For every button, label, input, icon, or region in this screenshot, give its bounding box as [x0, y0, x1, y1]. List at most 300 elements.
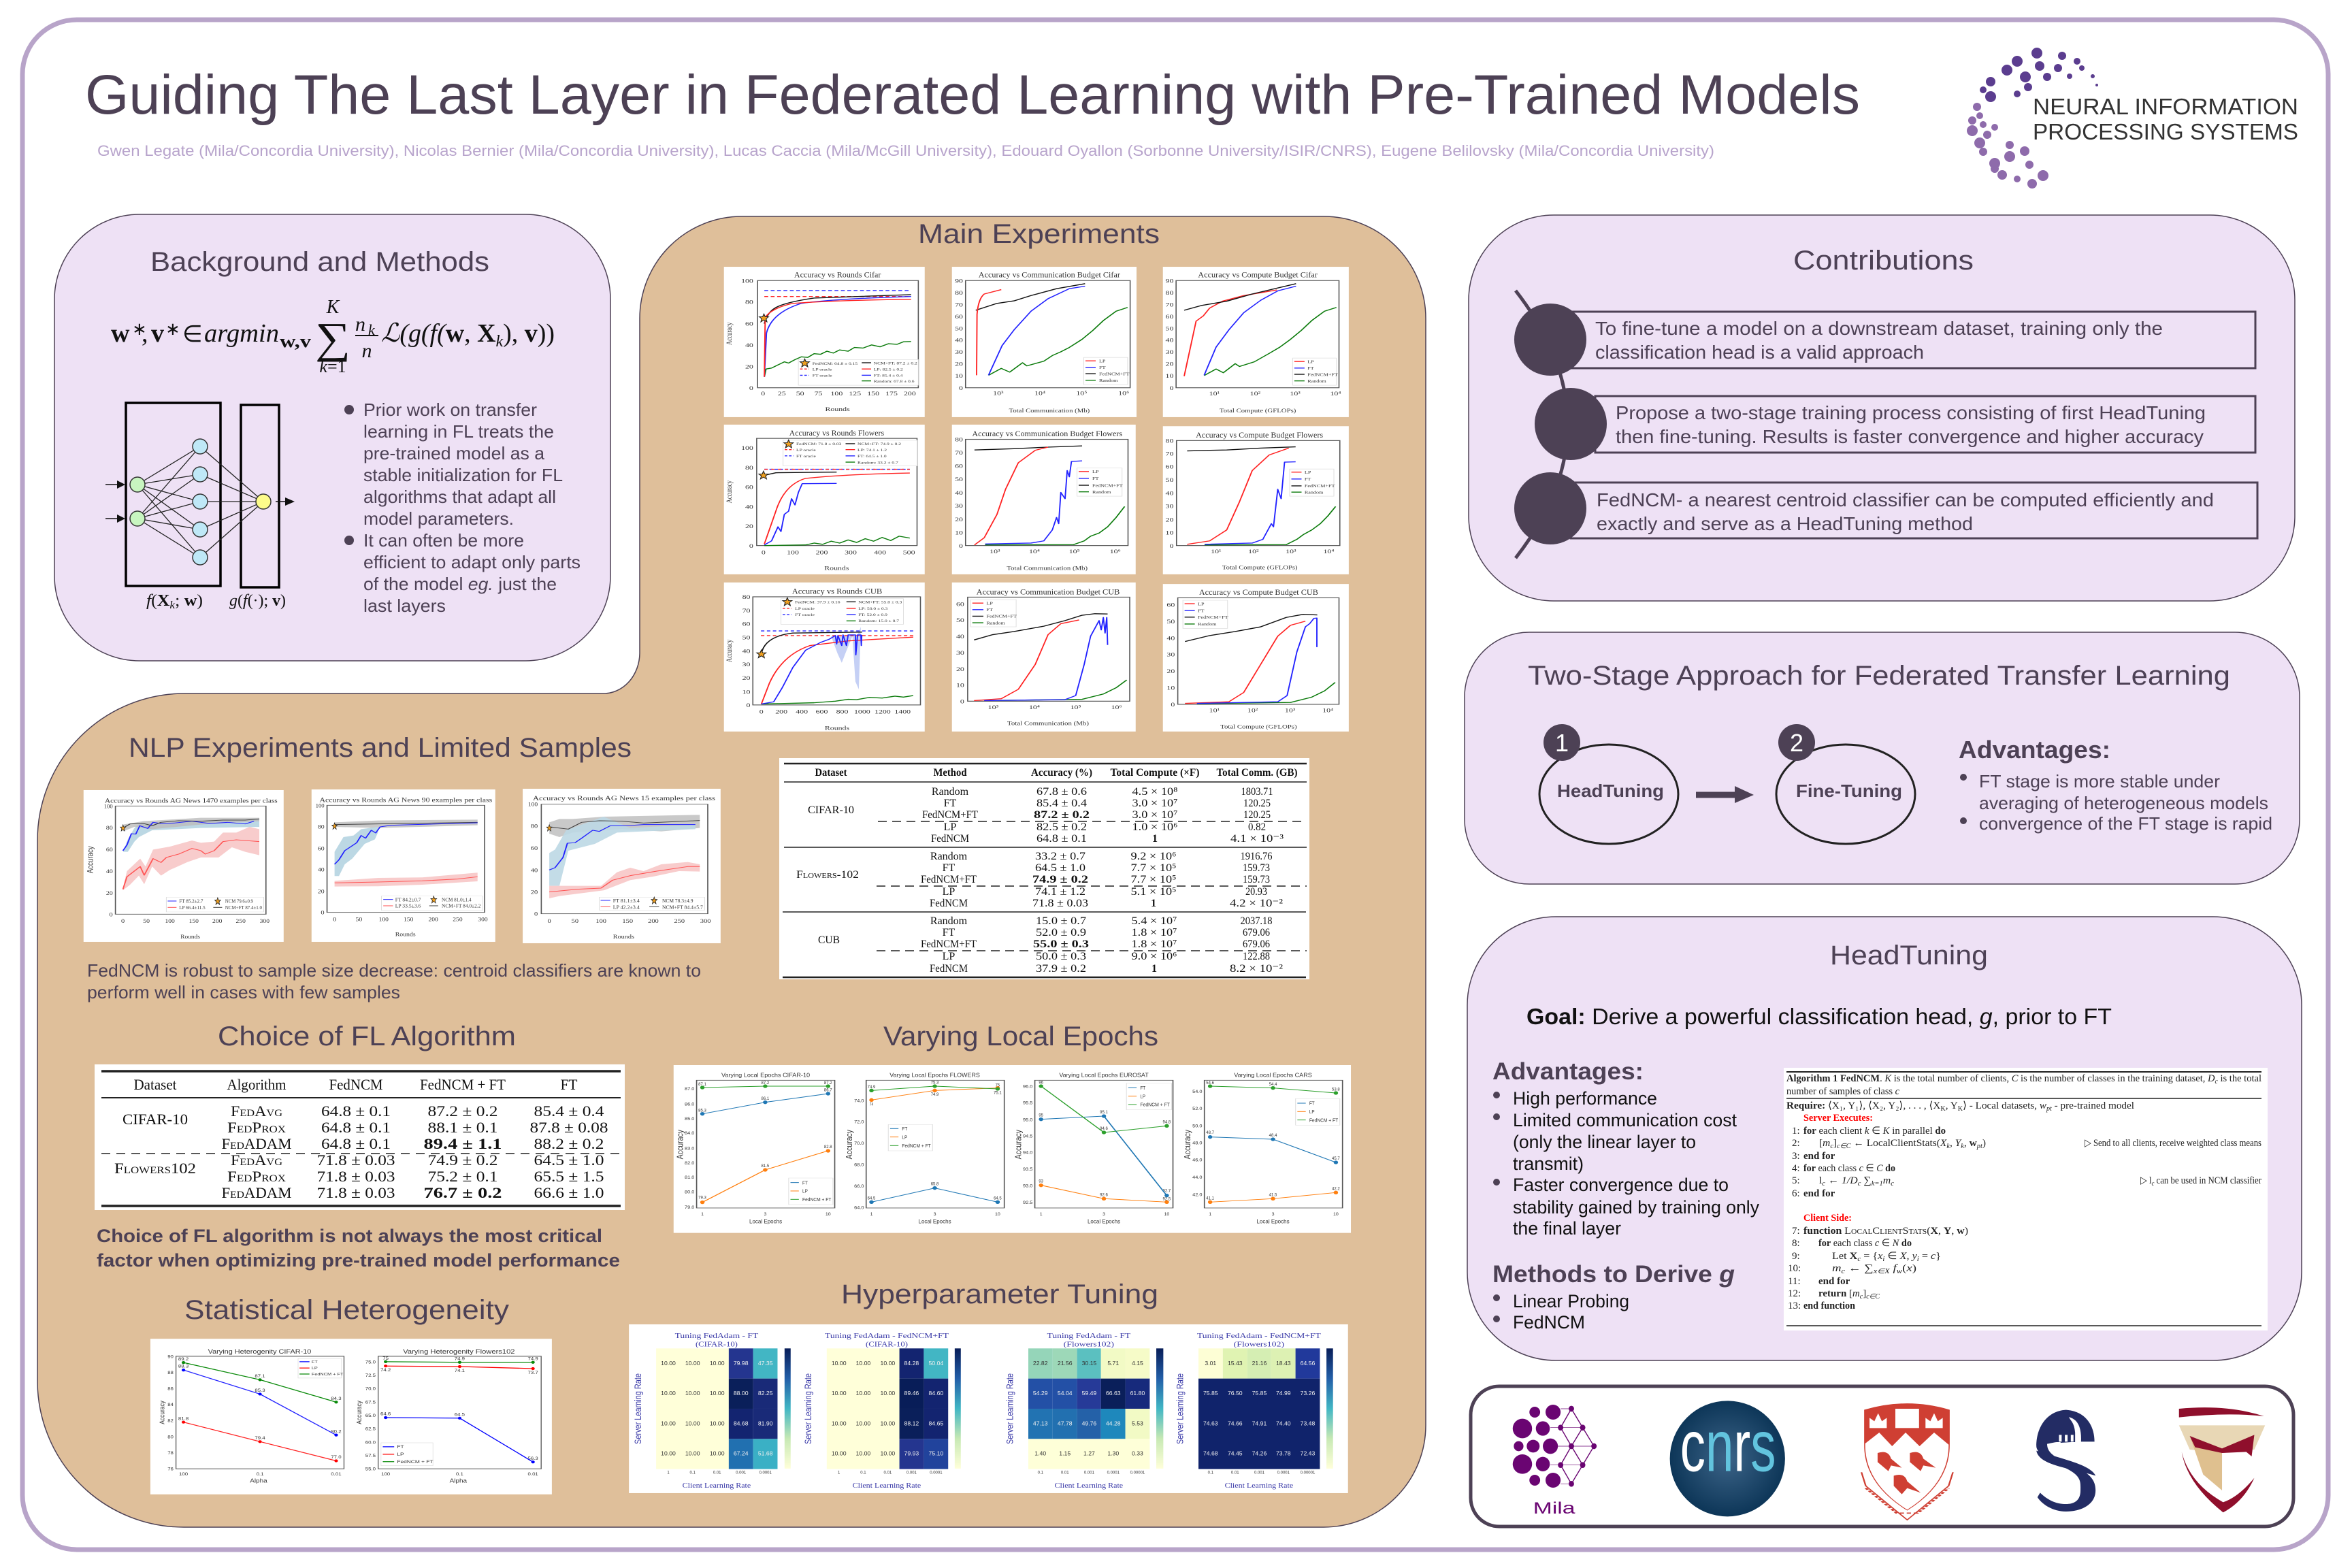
algorithm box: Algorithm 1 FedNCM. K is the total number of clients, C is the number of classes in the training dataset, D: [1786, 1073, 2215, 1084]
algorithm box: [m: [1819, 1138, 1830, 1149]
formula: [111, 297, 555, 376]
table: main results: 55.0 ± 0.3: [1033, 938, 1089, 950]
chart: accuracy vs communication flowers: 60: [955, 463, 963, 470]
algorithm box: l: [1819, 1175, 1822, 1186]
algorithm box: for each class c ∈ C do: [1803, 1163, 1895, 1174]
chart: accuracy vs rounds cub: 600: [816, 709, 828, 715]
chart: local epochs EuroSAT: 95.1: [1100, 1110, 1108, 1114]
chart: accuracy vs communication cifar: 10⁵: [1076, 391, 1088, 397]
chart: local epochs Flowers: 3: [934, 1212, 936, 1217]
chart: varying heterogeneity CIFAR-10: Alpha: [250, 1477, 267, 1484]
panel: headtuning: [1467, 917, 2302, 1360]
heatmap values: 0.0001: [1277, 1471, 1290, 1475]
table: main results: Total Compute (×F): [1111, 767, 1199, 779]
chart: local epochs CIFAR-10: 79.0: [685, 1205, 695, 1210]
chart: local epochs Flowers: 64.5: [994, 1196, 1002, 1200]
heatmap values: 10.00: [710, 1420, 725, 1426]
heading: background and methods: Background and Methods: [150, 247, 489, 277]
algorithm box: ]: [1833, 1138, 1837, 1149]
chart: AG News 90 examples: 60: [318, 845, 325, 851]
chart: local epochs EuroSAT: 94.5: [1023, 1134, 1032, 1139]
chart: AG News 90 examples: NCM 81.0±1.4: [442, 898, 472, 902]
chart: accuracy vs rounds cub: LP oracle: [795, 607, 815, 610]
table: main results: 4.1 × 10⁻³: [1230, 833, 1284, 845]
chart: local epochs EuroSAT: 92.5: [1023, 1200, 1032, 1205]
algorithm box: ,: [1950, 1138, 1955, 1149]
chart: local epochs CIFAR-10: 80.0: [685, 1190, 695, 1194]
chart: varying heterogeneity Flowers102: 74.1: [455, 1369, 465, 1373]
algorithm box: = {: [1861, 1251, 1878, 1262]
callout: FL algorithm finding: [97, 1226, 620, 1271]
table: main results: 120.25: [1243, 809, 1271, 821]
chart: local epochs CIFAR-10: Local Epochs: [749, 1218, 782, 1224]
chart: varying heterogeneity Flowers102: 75: [382, 1356, 389, 1361]
heatmap values: 10.00: [685, 1360, 700, 1367]
chart: accuracy vs rounds cifar: 50: [796, 391, 804, 397]
arrow: stage 1 to stage 2: [1696, 786, 1754, 803]
chart: local epochs CIFAR-10: 85.0: [685, 1117, 695, 1122]
algorithm box: for each client k ∈ K in parallel do: [1803, 1126, 1946, 1137]
text: FedNCM robustness note: perform well in cases with few samples: [87, 982, 400, 1002]
contribution 1: [1514, 304, 2255, 376]
chart: varying heterogeneity Flowers102: 55.0: [365, 1467, 376, 1471]
table: main results: 4.2 × 10⁻²: [1230, 898, 1283, 909]
chart: accuracy vs compute cub: 10²: [1247, 708, 1258, 714]
table: main results: 8.2 × 10⁻²: [1230, 963, 1283, 975]
chart: accuracy vs compute flowers: 30: [1166, 504, 1173, 510]
chart: accuracy vs rounds cub: FT: 52.0 ± 0.9: [858, 613, 888, 617]
heatmap values: 0.01: [1061, 1471, 1069, 1475]
heterogeneity charts: [150, 1339, 552, 1494]
text: two-stage advantages: convergence of the FT stage is rapid: [1979, 813, 2272, 834]
logo: Mila: [1513, 1405, 1597, 1517]
heatmap labels: Client Learning Rate: [1225, 1482, 1293, 1489]
heatmap values: 1.15: [1059, 1450, 1071, 1456]
chart: accuracy vs rounds flowers: 60: [745, 485, 753, 491]
table: main results: 37.9 ± 0.2: [1036, 963, 1086, 975]
chart: accuracy vs compute cub: LP: [1198, 602, 1205, 606]
chart: local epochs CIFAR-10: 87.1: [698, 1082, 706, 1086]
chart: accuracy vs compute cifar: 10³: [1290, 391, 1301, 397]
chart: varying heterogeneity CIFAR-10: 89.2: [178, 1357, 189, 1362]
formula: ∗: [132, 319, 147, 339]
algorithm box: end for: [1818, 1276, 1850, 1287]
chart: accuracy vs rounds cub: 1000: [854, 709, 870, 715]
chart: local epochs Cars: 50.0: [1192, 1124, 1203, 1128]
chart: AG News 15 examples: 20: [531, 889, 538, 896]
heatmaps: [629, 1324, 1348, 1493]
chart: local epochs CIFAR-10: 82.0: [685, 1161, 695, 1166]
algorithm box: 9:: [1792, 1251, 1800, 1262]
chart: AG News 15 examples: LP 42.2±3.4: [613, 905, 640, 910]
chart: accuracy vs communication flowers: 10⁵: [1069, 549, 1080, 555]
algorithm box: w: [2040, 1100, 2046, 1111]
chart: varying heterogeneity CIFAR-10: 90: [167, 1354, 174, 1359]
text: background bullets: efficient to adapt only parts: [363, 552, 581, 572]
chart: varying heterogeneity CIFAR-10: 82: [167, 1418, 174, 1423]
chart: accuracy vs compute flowers: 70: [1166, 451, 1173, 457]
text: headtuning advantages: Limited communication cost: [1513, 1110, 1737, 1130]
chart: accuracy vs communication cifar: 10³: [993, 391, 1004, 397]
text: FedNCM robustness note: FedNCM is robust to sample size decrease: centroid classifiers are known to: [87, 960, 701, 981]
chart: local epochs Flowers: 10: [995, 1212, 1000, 1217]
table: main results: FedNCM+FT: [921, 938, 977, 950]
table: main results: 1: [1152, 963, 1157, 975]
chart: local epochs EuroSAT: Accuracy: [1014, 1129, 1024, 1159]
table: main results: LP: [944, 821, 956, 833]
table: main results: 7.7 × 10⁵: [1131, 874, 1176, 885]
chart: AG News 1470 examples: 0: [121, 917, 125, 924]
chart: local epochs Cars: 10: [1333, 1212, 1339, 1217]
heading: main experiments: Main Experiments: [918, 219, 1160, 249]
chart: accuracy vs communication flowers: 40: [955, 490, 963, 496]
algorithm box: 1:: [1792, 1126, 1800, 1137]
chart: accuracy vs communication cifar: LP: [1099, 359, 1106, 363]
heatmap values: 0.0001: [760, 1471, 772, 1475]
chart: accuracy vs communication cub: 10⁶: [1111, 704, 1122, 710]
chart: AG News 1470 examples: 100: [165, 917, 175, 924]
chart: accuracy vs compute cub: Random: [1198, 622, 1217, 627]
chart: AG News 90 examples: 40: [318, 866, 325, 873]
algorithm box: 2:: [1792, 1138, 1800, 1149]
table: main results: Accuracy (%): [1031, 767, 1092, 779]
chart: local epochs EuroSAT: 10: [1164, 1212, 1169, 1217]
heatmap values: 74.40: [1276, 1420, 1291, 1426]
heatmap values: 88.12: [904, 1420, 919, 1426]
heatmap values: 0.0001: [1107, 1471, 1120, 1475]
table: FL algorithms: [95, 1064, 625, 1210]
chart: accuracy vs rounds flowers: 100: [741, 445, 753, 452]
table: main results: FT: [943, 862, 956, 874]
table: FL algorithms: 64.5 ± 1.0: [534, 1152, 604, 1169]
heatmap values: 67.24: [734, 1450, 749, 1456]
chart: accuracy vs compute cifar: FT: [1307, 366, 1314, 371]
chart: varying heterogeneity CIFAR-10: 85.3: [255, 1388, 265, 1393]
chart: accuracy vs communication flowers: Accuracy vs Communication Budget Flowers: [972, 429, 1122, 438]
diagram: neural network: g(f(·); v): [229, 592, 286, 610]
chart: AG News 15 examples: FT 81.1±3.4: [613, 898, 640, 904]
chart: accuracy vs compute flowers: 50: [1166, 477, 1173, 483]
chart: local epochs Flowers: 74.9: [931, 1092, 938, 1096]
heatmap values: 72.43: [1301, 1450, 1315, 1456]
heatmap labels: Client Learning Rate: [683, 1482, 751, 1489]
algorithm box: - pre-trained model: [2052, 1100, 2134, 1111]
algorithm box: ← LocalClientStats(: [1851, 1138, 1940, 1149]
heatmap values: 10.00: [685, 1420, 700, 1426]
algorithm box: 12:: [1788, 1288, 1801, 1299]
table: FL algorithms: 65.5 ± 1.5: [534, 1168, 604, 1185]
chart: AG News 1470 examples: 200: [212, 917, 223, 924]
heatmap values: 1: [838, 1471, 840, 1475]
algorithm box: x: [1877, 1251, 1883, 1262]
heatmap values: 61.80: [1130, 1390, 1145, 1396]
heatmap: FedAdam FedNCM+FT CIFAR-10: [827, 1348, 961, 1469]
heatmap values: 10.00: [710, 1360, 725, 1367]
heatmap values: 10.00: [661, 1390, 676, 1396]
chart: local epochs Cars: 42.0: [1192, 1192, 1203, 1197]
chart: accuracy vs communication cifar: [952, 267, 1137, 417]
text: methods to derive g: [1492, 1261, 1735, 1333]
algorithm box: 10:: [1788, 1263, 1801, 1274]
chart: AG News 90 examples: Accuracy vs Rounds AG News 90 examples per class: [319, 797, 492, 804]
chart: local epochs Flowers: 72.0: [854, 1120, 864, 1124]
heatmap labels: (Flowers102): [1064, 1340, 1114, 1348]
chart: local epochs CIFAR-10: 86.0: [685, 1102, 695, 1107]
logo: Sorbonne: [2036, 1410, 2095, 1512]
chart: local epochs Flowers: Varying Local Epochs FLOWERS: [889, 1073, 980, 1079]
chart: local epochs Cars: 46.0: [1192, 1158, 1203, 1163]
chart: accuracy vs rounds flowers: [724, 425, 925, 574]
table: main results: LP: [943, 951, 955, 962]
table: main results: Dataset: [815, 767, 847, 779]
table: FL algorithms: Algorithm: [227, 1076, 286, 1093]
heatmap values: 10.00: [685, 1450, 700, 1456]
heatmap values: 10.00: [856, 1450, 870, 1456]
heatmap values: 49.76: [1082, 1420, 1096, 1426]
table: main results: 64.8 ± 0.1: [1036, 833, 1087, 845]
heatmap values: 10.00: [881, 1360, 895, 1367]
heatmap labels: Client Learning Rate: [853, 1482, 921, 1489]
chart: AG News 1470 examples: NCM 79.6±0.9: [225, 899, 253, 904]
chart: accuracy vs compute cifar: 40: [1166, 338, 1173, 344]
chart: accuracy vs compute cub: FT: [1198, 608, 1205, 613]
algorithm box: Client Side:: [1803, 1213, 1852, 1224]
chart: accuracy vs rounds cub: 200: [775, 709, 787, 715]
chart: AG News 90 examples: 250: [453, 916, 463, 922]
algorithm box: 3:: [1792, 1151, 1800, 1162]
local epochs charts: [674, 1065, 1351, 1233]
formula: k: [368, 321, 376, 338]
chart: varying heterogeneity CIFAR-10: 0.1: [257, 1472, 264, 1477]
chart: local epochs Flowers: 1: [870, 1212, 873, 1217]
algorithm box: 8:: [1792, 1238, 1800, 1249]
heatmap values: 74.26: [1252, 1450, 1267, 1456]
chart: accuracy vs rounds cub: [724, 583, 925, 732]
chart: accuracy vs rounds cub: Accuracy: [725, 639, 734, 662]
chart: varying heterogeneity Flowers102: 100: [381, 1472, 390, 1477]
chart: accuracy vs communication cub: [952, 583, 1136, 732]
chart: varying heterogeneity Flowers102: LP: [397, 1452, 404, 1457]
chart: local epochs Flowers: LP: [902, 1135, 907, 1140]
heatmap values: 15.43: [1228, 1360, 1243, 1367]
table: FL algorithms: CIFAR-10: [122, 1111, 188, 1128]
logo: NeurIPS: NEURAL INFORMATION: [2033, 94, 2298, 119]
chart: accuracy vs communication flowers: 10³: [990, 549, 1000, 555]
formula: w,v: [280, 331, 311, 351]
chart: local epochs Cars: 54.0: [1192, 1090, 1203, 1094]
algorithm box: c}: [1931, 1251, 1940, 1262]
chart: accuracy vs compute flowers: 10³: [1286, 549, 1296, 555]
chart: local epochs EuroSAT: 92.5: [1163, 1196, 1171, 1201]
heatmap labels: Tuning FedAdam - FT: [1047, 1332, 1130, 1339]
chart: AG News 15 examples: 250: [674, 917, 685, 924]
heatmap labels: Client Learning Rate: [1055, 1482, 1123, 1489]
text: headtuning advantages: stability gained by training only: [1513, 1197, 1759, 1218]
chart: accuracy vs communication cub: FT: [986, 608, 994, 612]
stage 2 node: Fine-Tuning: [1796, 781, 1902, 801]
chart: accuracy vs compute cub: 10¹: [1209, 708, 1220, 714]
heatmap values: 0.1: [1208, 1471, 1214, 1475]
table: FL algorithms: 76.7 ± 0.2: [423, 1184, 502, 1201]
table: FL algorithms: 71.8 ± 0.03: [317, 1184, 395, 1201]
chart: local epochs EuroSAT: LP: [1140, 1094, 1145, 1099]
heading: contributions: Contributions: [1793, 246, 1974, 276]
table: FL algorithms: FedNCM: [329, 1076, 382, 1093]
chart: AG News 90 examples: 50: [355, 916, 362, 922]
chart: local epochs EuroSAT: 92.7: [1163, 1188, 1171, 1193]
text: two-stage advantages: [1959, 736, 2272, 834]
algorithm box: i: [1882, 1256, 1885, 1263]
chart: accuracy vs rounds cifar: 60: [745, 321, 753, 327]
chart: accuracy vs compute cifar: 70: [1166, 302, 1173, 308]
algorithm box: end function: [1803, 1301, 1856, 1311]
heatmap values: 74.45: [1228, 1450, 1243, 1456]
chart: local epochs Flowers: 74.0: [854, 1098, 864, 1103]
chart: local epochs CIFAR-10: 87.2: [762, 1081, 769, 1085]
formula: ∗: [165, 319, 180, 339]
table: main results: Random: [930, 915, 968, 927]
heatmap values: 74.91: [1252, 1420, 1267, 1426]
heatmap: FedAdam FedNCM+FT Flowers102: [1198, 1348, 1333, 1469]
chart: accuracy vs rounds cub: Rounds: [825, 725, 849, 732]
chart: varying heterogeneity Flowers102: Accuracy: [355, 1401, 363, 1424]
chart: AG News 1470 examples: 40: [106, 868, 113, 875]
heatmap labels: Tuning FedAdam - FT: [675, 1332, 759, 1339]
chart: local epochs EuroSAT: 94.6: [1100, 1126, 1108, 1130]
algorithm box: is the total: [2218, 1073, 2261, 1084]
heatmap values: 10.00: [832, 1360, 847, 1367]
table: main results: 1916.76: [1240, 851, 1273, 862]
table: main results: 1.0 × 10⁶: [1132, 821, 1177, 833]
chart: varying heterogeneity Flowers102: 74.9: [528, 1356, 538, 1361]
chart: local epochs CIFAR-10: 81.0: [685, 1175, 695, 1180]
stage 1 node: [1539, 724, 1678, 844]
chart: AG News 1470 examples: Accuracy vs Rounds AG News 1470 examples per class: [105, 798, 278, 804]
chart: varying heterogeneity Flowers102: 74.2: [380, 1368, 391, 1373]
stage 2 node: 2: [1790, 729, 1803, 757]
formula: argmin: [204, 319, 279, 348]
heatmap: FedAdam FT Flowers102: [1028, 1348, 1163, 1469]
chart: accuracy vs compute flowers: LP: [1305, 470, 1311, 475]
chart: AG News 1470 examples: Accuracy: [86, 846, 95, 873]
chart: local epochs EuroSAT: 1: [1040, 1212, 1043, 1217]
formula: v: [151, 319, 164, 348]
heatmap labels: (CIFAR-10): [696, 1340, 738, 1348]
chart: accuracy vs rounds flowers: 80: [745, 465, 753, 472]
chart: varying heterogeneity CIFAR-10: Varying Heterogenity CIFAR-10: [208, 1349, 312, 1356]
chart: varying heterogeneity CIFAR-10: 81.8: [178, 1416, 189, 1421]
table: main results: FedNCM: [930, 963, 968, 975]
chart: AG News 90 examples: LP 33.5±3.6: [395, 904, 421, 909]
text: FedNCM robustness note: [87, 960, 701, 1002]
chart: accuracy vs communication cifar: Accuracy vs Communication Budget Cifar: [979, 271, 1120, 279]
chart: local epochs CIFAR-10: Varying Local Epochs CIFAR-10: [721, 1073, 810, 1079]
chart: accuracy vs compute flowers: 10¹: [1211, 549, 1222, 555]
chart: accuracy vs rounds cifar: 75: [815, 391, 822, 397]
NLP charts: [84, 789, 721, 943]
heatmap values: 74.99: [1276, 1390, 1291, 1396]
chart: accuracy vs compute flowers: 0: [1169, 543, 1173, 549]
title: Guiding The Last Layer in Federated Learning with Pre-Trained Models: [85, 64, 1860, 126]
chart: accuracy vs communication cifar: 10⁴: [1034, 391, 1046, 397]
chart: accuracy vs communication cifar: 80: [955, 290, 963, 296]
chart: accuracy vs rounds cifar: Accuracy: [725, 322, 734, 345]
chart: accuracy vs communication cifar: 60: [955, 314, 963, 320]
chart: accuracy vs communication cub: LP: [986, 601, 993, 606]
table: FL algorithms: 71.8 ± 0.03: [317, 1168, 395, 1185]
chart: accuracy vs rounds cub: 50: [742, 635, 750, 641]
heatmap values: 3.01: [1205, 1360, 1216, 1367]
chart: accuracy vs rounds flowers: 500: [903, 550, 915, 556]
table: FL algorithms: 88.1 ± 0.1: [427, 1119, 498, 1136]
text: headtuning advantages: Advantages:: [1492, 1058, 1644, 1085]
chart: AG News 1470 examples: Rounds: [180, 933, 200, 940]
chart: accuracy vs rounds flowers: 400: [874, 550, 886, 556]
chart: accuracy vs rounds cifar: NCM+FT: 87.2 ± 0.2: [874, 361, 917, 365]
chart: accuracy vs rounds flowers: LP: 74.1 ± 1.2: [858, 448, 887, 453]
table: main results: Total Comm. (GB): [1217, 767, 1297, 779]
table: main results: 5.4 × 10⁷: [1131, 915, 1177, 927]
chart: accuracy vs rounds cub: Random: 15.0 ± 0.7: [858, 619, 900, 623]
chart: AG News 1470 examples: LP 66.4±11.5: [179, 905, 206, 911]
table: FL algorithms: FT: [561, 1076, 578, 1093]
text: goal: Goal: Derive a powerful classification head, g, prior to FT: [1526, 1004, 2112, 1029]
chart: local epochs Flowers: 64.0: [854, 1205, 864, 1211]
diagram: neural network: k: [169, 600, 176, 611]
heatmap labels: Tuning FedAdam - FedNCM+FT: [1197, 1332, 1321, 1339]
chart: AG News 90 examples: Rounds: [395, 931, 416, 938]
table: main results: 71.8 ± 0.03: [1032, 898, 1088, 909]
chart: accuracy vs rounds cifar: FT: 85.4 ± 0.4: [874, 374, 903, 378]
chart: accuracy vs rounds cifar: FT oracle: [813, 374, 832, 378]
algorithm box: can be used in NCM classifier: [2154, 1175, 2261, 1186]
chart: local epochs EuroSAT: 92.6: [1100, 1192, 1108, 1197]
chart: accuracy vs communication cifar: 40: [955, 338, 963, 344]
heatmap labels: (CIFAR-10): [866, 1340, 908, 1348]
table: FL algorithms: FedNCM + FT: [420, 1076, 506, 1093]
chart: accuracy vs compute flowers: 20: [1166, 517, 1173, 523]
chart: local epochs CIFAR-10: 10: [826, 1212, 831, 1217]
heatmap values: 21.56: [1058, 1360, 1073, 1367]
algorithm box: ←: [1825, 1175, 1842, 1186]
algorithm box: x∈X: [1872, 1268, 1891, 1275]
chart: local epochs EuroSAT: Varying Local Epochs EUROSAT: [1059, 1073, 1149, 1079]
chart: local epochs Cars: 45.7: [1332, 1156, 1340, 1160]
heading: statistical heterogeneity: Statistical Heterogeneity: [184, 1295, 509, 1325]
algorithm box: end for: [1803, 1188, 1835, 1199]
heatmap labels: (Flowers102): [1234, 1340, 1284, 1348]
heatmap values: 10.00: [881, 1390, 895, 1396]
heatmap values: 10.00: [856, 1420, 870, 1426]
chart: AG News 15 examples: [523, 789, 721, 943]
chart: local epochs CIFAR-10: 1: [701, 1212, 704, 1217]
chart: accuracy vs rounds flowers: 20: [745, 523, 753, 529]
algorithm box: 5:: [1792, 1175, 1800, 1186]
algorithm box: Y: [1955, 1138, 1962, 1149]
algorithm box: ⟩ - Local datasets,: [1963, 1100, 2040, 1111]
chart: accuracy vs communication flowers: 0: [959, 543, 963, 549]
chart: varying heterogeneity CIFAR-10: 88: [167, 1371, 174, 1375]
chart: local epochs Cars: FedNCM + FT: [1309, 1118, 1338, 1123]
callout: FL algorithm finding: Choice of FL algorithm is not always the most critical: [97, 1226, 602, 1246]
chart: accuracy vs rounds cub: 400: [796, 709, 808, 715]
heatmap values: 47.35: [758, 1360, 773, 1367]
chart: accuracy vs compute cub: Accuracy vs Compute Budget CUB: [1199, 588, 1318, 597]
table: FL algorithms: Dataset: [133, 1076, 177, 1093]
formula: n: [355, 313, 365, 336]
chart: local epochs CIFAR-10: 87.0: [685, 1087, 695, 1092]
algorithm box: c∈C: [1837, 1143, 1851, 1150]
